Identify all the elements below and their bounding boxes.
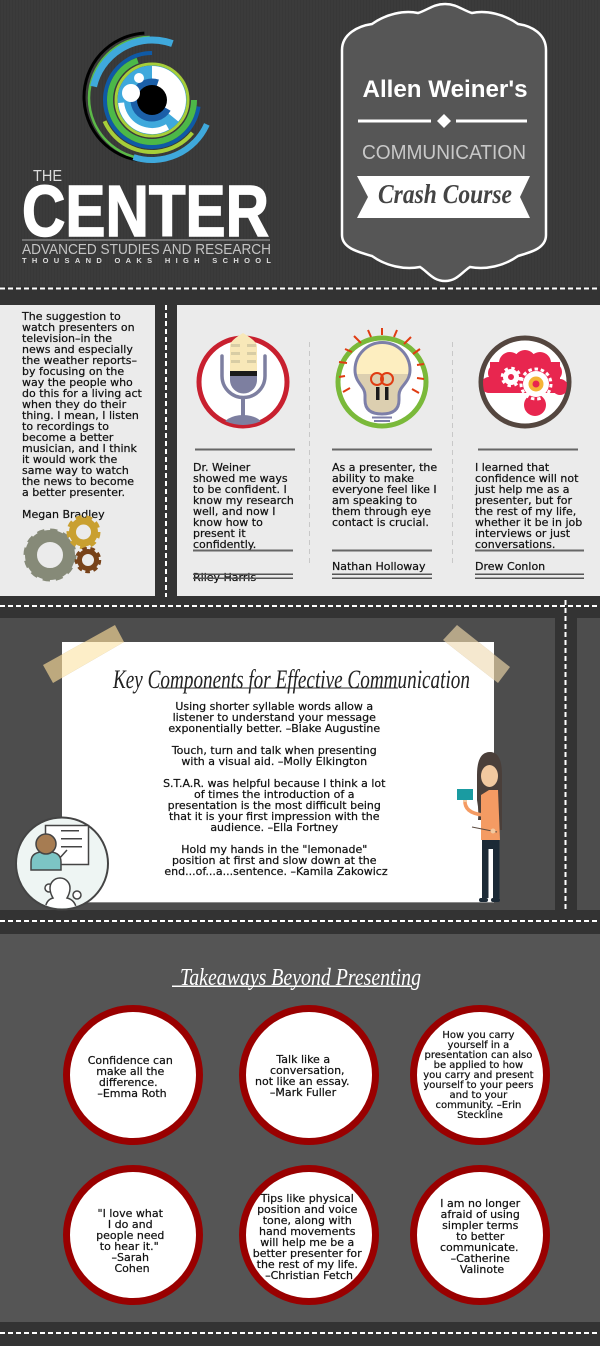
quotes: listener to understand your message [173,711,376,724]
quotes: that it is your first impression with the [169,810,380,823]
quotes: presentation is the most difficult being [168,799,381,812]
quote: Drew Conlon [474,448,586,579]
icon: gears [26,517,100,579]
quote text: do this for a living act [22,387,143,400]
circle: Emma Roth: –Emma Roth [97,1087,167,1100]
circle: Erin Steckline: and to your [450,1090,508,1101]
circle: Catherine Valinote: –Catherine [451,1252,510,1265]
circle: Sarah Cohen: to hear it." [100,1240,159,1253]
quote text: when they do their [22,398,127,411]
icon: brain with gears [481,338,569,426]
quote: Drew Conlon: just help me as a [474,483,570,496]
heading: key components: Key Components for Effective Communication [112,665,470,694]
circle: Sarah Cohen [66,1168,200,1302]
circle: Emma Roth: difference. [99,1076,158,1089]
circle: Sarah Cohen: "I love what [98,1207,164,1220]
quote: Drew Conlon: conversations. [475,538,555,551]
quotes: S.T.A.R. was helpful because I think a lot [163,777,386,790]
text: CENTER: CENTER [22,172,269,252]
circle: Christian Fetch: –Christian Fetch [265,1269,353,1282]
quote: Drew Conlon: Drew Conlon [475,560,545,573]
quote: Riley Harris: Riley Harris [193,571,256,584]
quotes: with a visual aid. –Molly Elkington [181,755,367,768]
circle: Mark Fuller: conversation, [270,1064,345,1077]
circle: Erin Steckline: community. –Erin [435,1100,521,1111]
icon: light bulb [338,328,426,426]
heading: Communication: COMMUNICATION [362,142,526,164]
circle: Mark Fuller: –Mark Fuller [270,1086,337,1099]
quote: Drew Conlon: interviews or just [475,527,571,540]
tape: left [43,625,124,683]
heading: Allen Weiner's: Allen Weiner's [362,76,528,103]
circle: Catherine Valinote: to better [456,1230,505,1243]
circle: Erin Steckline: you carry and present [423,1070,534,1081]
author name: Megan Bradley [22,508,105,521]
circle: Catherine Valinote: Valinote [460,1263,504,1276]
circle: Christian Fetch: position and voice [257,1203,358,1216]
circle: Erin Steckline: presentation can also [424,1050,532,1061]
circle: Sarah Cohen: I do and [108,1218,153,1231]
quote: Nathan Holloway: contact is crucial. [332,516,429,529]
quote text: to recordings to [22,420,109,433]
icon: microphone [199,333,287,441]
quote: Nathan Holloway [332,448,441,579]
badge shape [342,4,546,281]
quotes: audience. –Ella Fortney [210,821,339,834]
quote text: by focusing on the [22,365,124,378]
circle: Catherine Valinote: afraid of using [441,1208,520,1221]
quotes: Touch, turn and talk when presenting [171,744,377,757]
circle: Catherine Valinote [414,1168,546,1302]
quote text: thing. I mean, I listen [22,409,139,422]
heading: takeaways: Takeaways Beyond Presenting [180,965,421,991]
quote: Riley Harris: to be confident. I [193,483,287,496]
circle: Erin Steckline [414,1008,546,1142]
paper sheet [62,642,494,902]
quote text: television–in the [22,332,112,345]
circle: Emma Roth: Confidence can [88,1054,173,1067]
quote text: musician, and I think [22,442,138,455]
icon: eye highlight large [122,84,140,102]
quote text: The suggestion to [21,310,121,323]
circle: Emma Roth [66,1008,200,1142]
quote: Nathan Holloway: As a presenter, the [332,461,437,474]
circle: Erin Steckline: be applied to how [434,1060,523,1071]
quote: Drew Conlon: whether it be in job [475,516,582,529]
icon: pupil [137,85,167,115]
quote: Riley Harris: Dr. Weiner [193,461,251,474]
quote: Drew Conlon: I learned that [475,461,550,474]
divider with diamond [358,114,527,128]
badge: course title [342,4,546,281]
quote text: a better presenter. [22,486,125,499]
quote: Riley Harris: well, and now I [193,505,276,518]
circle: Christian Fetch: Tips like physical [260,1192,354,1205]
circle: Erin Steckline: How you carry [442,1030,515,1041]
circle: Catherine Valinote: I am no longer [440,1197,521,1210]
circle: Emma Roth: make all the [96,1065,165,1078]
circle: Sarah Cohen: people need [96,1229,164,1242]
quote: Drew Conlon: confidence will not [475,472,579,485]
circle: Mark Fuller: not like an essay. [255,1075,349,1088]
quote: Nathan Holloway: Nathan Holloway [332,560,426,573]
icon: teacher and audience [16,818,108,912]
header band [0,0,600,286]
icon: eye rings [58,7,238,187]
quotes: of times the introduction of a [194,788,354,801]
quotes: position at first and slow down at the [172,854,377,867]
circle: Erin Steckline: Steckline [457,1110,503,1121]
quote text: way the people who [22,376,133,389]
circle: Catherine Valinote: simpler terms [442,1219,519,1232]
quote: Nathan Holloway: everyone feel like I [332,483,437,496]
quotes: Hold my hands in the "lemonade" [181,843,367,856]
icon: eye highlight small [134,73,144,83]
panel: key components [0,618,600,912]
circle: Sarah Cohen: –Sarah [112,1251,149,1264]
circle: Christian Fetch: hand movements [259,1225,356,1238]
panel: Megan Bradley quote [0,305,155,596]
panel: takeaways [0,934,600,1322]
panel: student quotes [177,305,600,596]
quote: Drew Conlon: presenter, but for [475,494,572,507]
text: THE: THE [33,168,62,185]
text: Thousand Oaks High School: THOUSAND OAKS HIGH SCHOOL [22,256,271,265]
quotes: Using shorter syllable words allow a [175,700,373,713]
quotes: end...of...a...sentence. –Kamila Zakowicz [164,865,388,878]
circle: Mark Fuller [242,1008,376,1142]
quote: Riley Harris: showed me ways [193,472,288,485]
quote text: same way to watch [22,464,129,477]
circle: Erin Steckline: yourself in a [448,1040,509,1051]
quote text: the news to become [22,475,134,488]
quote: Riley Harris: know my research [193,494,294,507]
circle: Mark Fuller: Talk like a [275,1053,330,1066]
ribbon: Crash Course: Crash Course [378,179,512,209]
circle: Erin Steckline: yourself to your peers [423,1080,534,1091]
text: Advanced Studies and Research: ADVANCED STUDIES AND RESEARCH [22,242,271,258]
ribbon: Crash Course [357,176,530,218]
circle: Christian Fetch [242,1168,376,1302]
quote: Nathan Holloway: them through eye [332,505,431,518]
quote: Drew Conlon: the rest of my life, [475,505,576,518]
quotes: exponentially better. –Blake Augustine [168,722,380,735]
quote: Nathan Holloway: ability to make [332,472,414,485]
quote: Riley Harris: present it [193,527,246,540]
logo: The Center [22,7,271,265]
quote text: the weather reports– [22,354,137,367]
circle: Sarah Cohen: Cohen [114,1262,150,1275]
circle: Catherine Valinote: communicate. [440,1241,519,1254]
quote: Nathan Holloway: am speaking to [332,494,417,507]
quote text: it would work the [22,453,117,466]
circle: Christian Fetch: will help me be a [260,1236,354,1249]
quote: Riley Harris [193,448,297,584]
quote: Riley Harris: know how to [193,516,263,529]
quote text: news and especially [22,343,133,356]
tape: right [443,625,510,683]
quote text: become a better [22,431,114,444]
circle: Christian Fetch: the rest of my life. [257,1258,358,1271]
circle: Christian Fetch: tone, along with [263,1214,352,1227]
quote: Riley Harris: confidently. [193,538,256,551]
quote text: watch presenters on [22,321,135,334]
illustration: woman presenter [457,752,502,902]
circle: Christian Fetch: better presenter for [253,1247,362,1260]
